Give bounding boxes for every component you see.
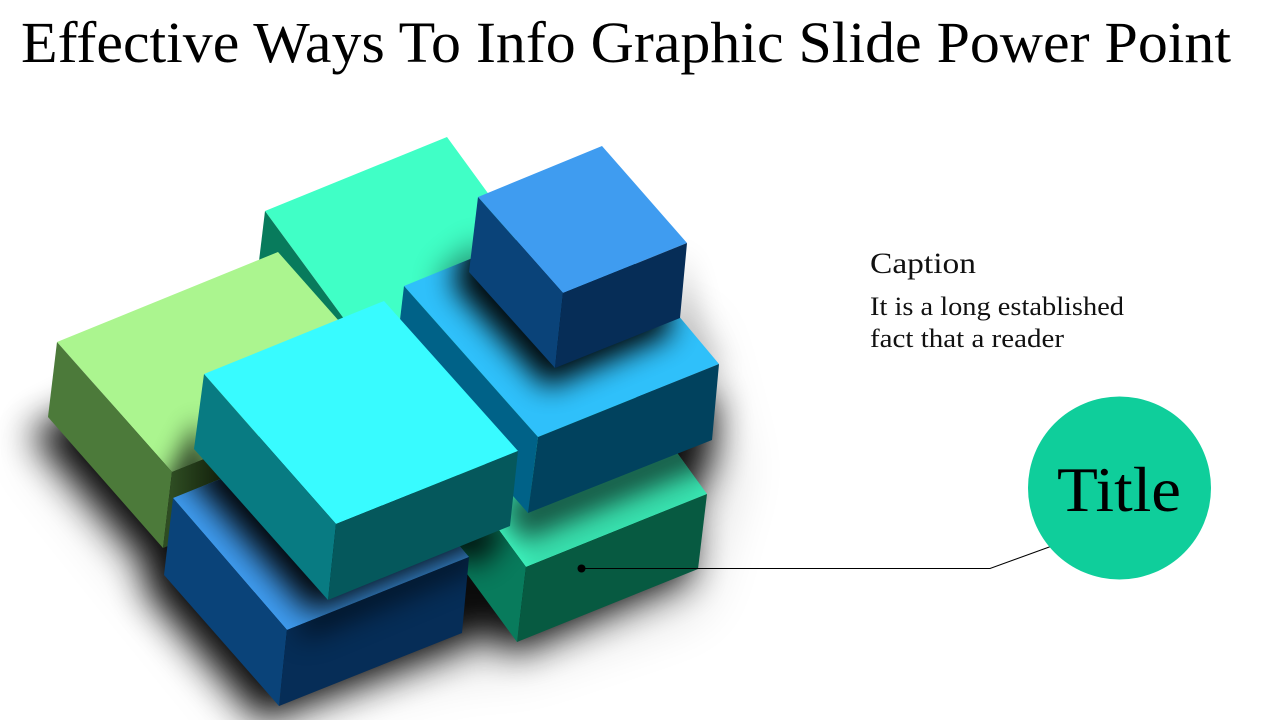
background shadows	[20, 250, 740, 720]
light green right face	[163, 382, 393, 548]
light green top face	[57, 252, 338, 472]
mid blue top face	[404, 240, 719, 437]
caption body: It is a long established	[870, 292, 1124, 321]
block: top blue cube	[469, 146, 687, 368]
title circle: Title	[1057, 454, 1181, 525]
caption body	[870, 292, 1124, 353]
light green left face	[48, 342, 172, 548]
lower blue top face	[173, 479, 469, 630]
lower blue left face	[164, 498, 287, 706]
cube top face	[478, 146, 687, 293]
caption body: fact that a reader	[870, 324, 1064, 353]
cyan right face	[328, 451, 518, 600]
mid blue right face	[528, 364, 719, 513]
block: long mint block	[256, 137, 730, 642]
leader line	[578, 546, 1052, 572]
mid blue left face	[395, 286, 538, 513]
block: light green	[48, 252, 338, 548]
title: Effective Ways To Info Graphic Slide Power Point	[21, 10, 1231, 75]
mint top face	[265, 137, 730, 580]
block: lower blue	[164, 479, 469, 706]
title circle	[1028, 396, 1211, 580]
mint left face	[256, 211, 526, 642]
cyan top face	[204, 301, 518, 524]
cyan left face	[194, 374, 336, 600]
block: cyan	[194, 301, 518, 600]
lower blue right face	[279, 557, 469, 706]
cube left face	[469, 197, 563, 368]
block: mid blue	[400, 240, 719, 513]
cube right face	[555, 243, 687, 368]
caption heading: Caption	[870, 247, 976, 280]
mint right face	[517, 494, 707, 642]
